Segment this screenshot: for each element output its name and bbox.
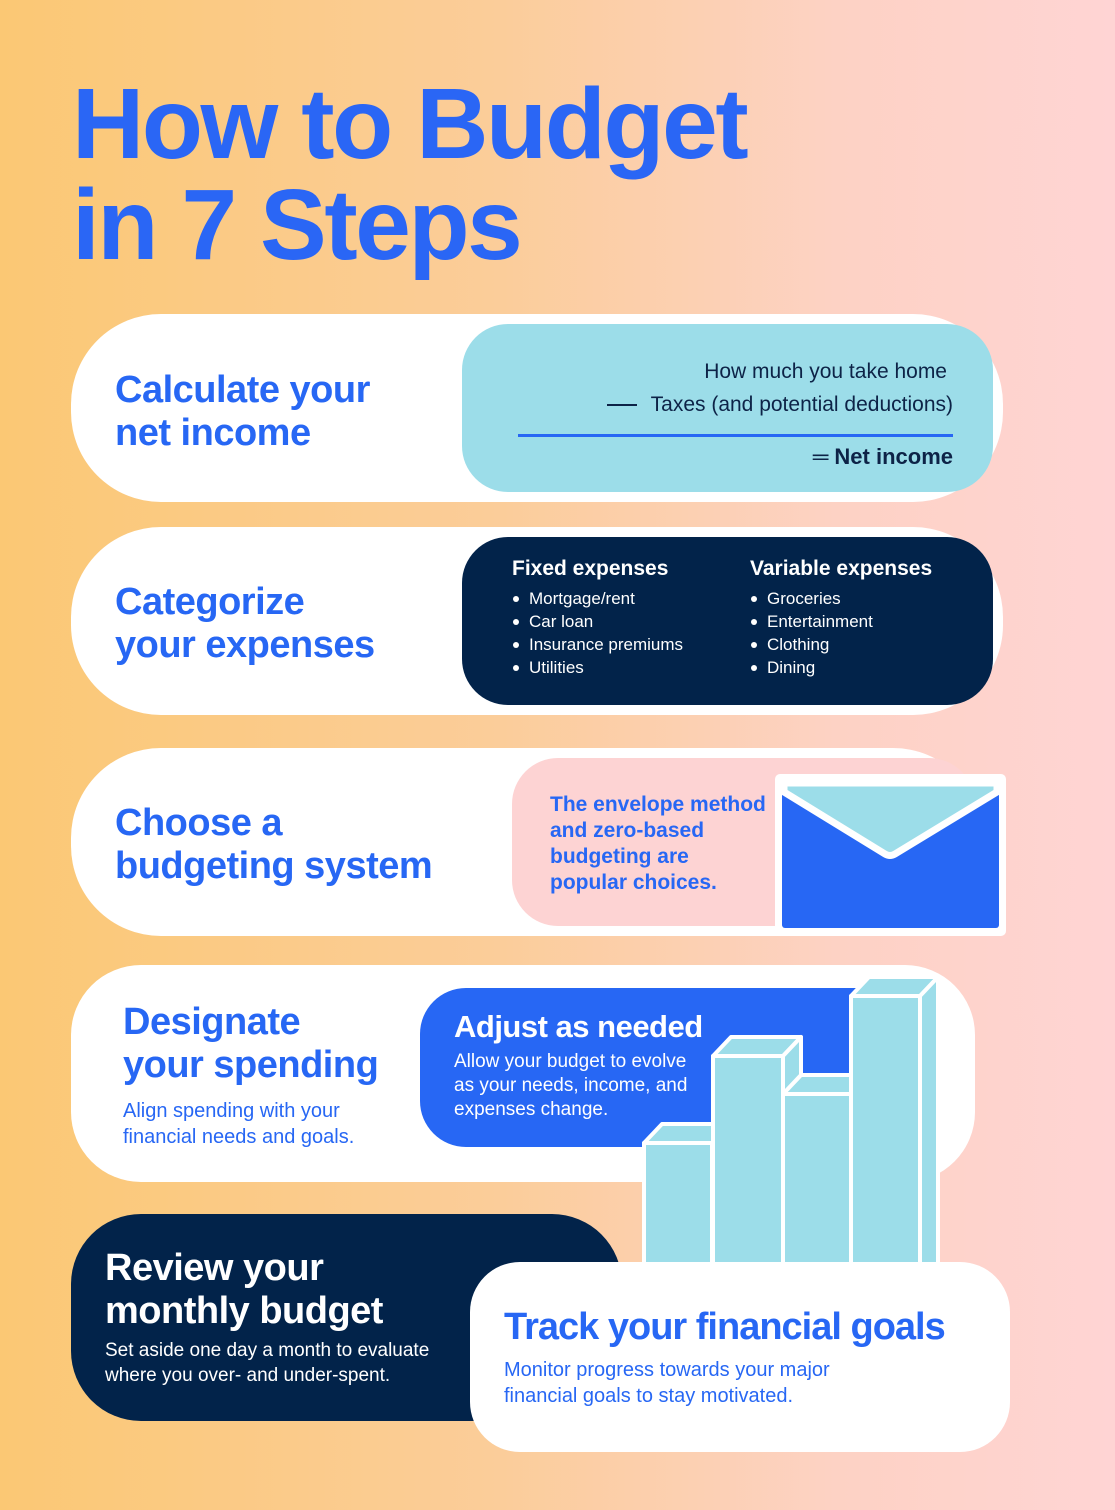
panel: step 2 categorize expenses: [71, 527, 1003, 715]
text: track description: [504, 1359, 830, 1407]
text: track description: Monitor progress towards your major: [504, 1359, 830, 1381]
heading: review your monthly budget: Review your: [105, 1247, 323, 1289]
formula box: ═ Net income: [813, 444, 953, 469]
text: review description: Set aside one day a month to evaluate: [105, 1340, 429, 1361]
icon: envelope: [775, 774, 1006, 936]
text: designate description: financial needs and goals.: [123, 1126, 354, 1148]
expenses box: Fixed expenses: [512, 557, 668, 580]
expenses box: Car loan: [529, 612, 593, 631]
expenses box: Clothing: [767, 635, 829, 654]
title: [72, 68, 748, 281]
expenses box: Groceries: [767, 589, 841, 608]
heading: choose a budgeting system: Choose a: [115, 802, 282, 844]
expenses box: Insurance premiums: [529, 635, 683, 654]
heading: adjust as needed: Adjust as needed: [454, 1009, 703, 1044]
expenses box: Utilities: [529, 658, 584, 677]
formula box: Taxes (and potential deductions): [651, 393, 953, 416]
panel: step 7 track financial goals: [470, 1262, 1010, 1452]
callout: envelope method: budgeting are: [550, 845, 689, 868]
text: review description: where you over- and under-spent.: [105, 1365, 390, 1386]
formula box: How much you take home: [704, 360, 947, 383]
expenses box: Dining: [767, 658, 815, 677]
panel: step 5 adjust as needed: [420, 988, 870, 1147]
text: designate description: [123, 1100, 354, 1148]
heading: choose a budgeting system: [115, 802, 432, 887]
expenses box: [462, 537, 993, 705]
text: designate description: Align spending with your: [123, 1100, 340, 1122]
callout: envelope method: The envelope method: [550, 793, 766, 816]
bar chart icon: [642, 979, 940, 1262]
heading: choose a budgeting system: budgeting system: [115, 845, 432, 887]
text: adjust description: as your needs, income, and: [454, 1075, 687, 1096]
text: adjust description: Allow your budget to evolve: [454, 1051, 686, 1072]
callout: envelope method: [512, 758, 975, 926]
text: adjust description: [454, 1051, 687, 1120]
panel: step 3 choose budgeting system: [71, 748, 983, 936]
formula box: [462, 324, 993, 492]
heading: review your monthly budget: [105, 1247, 383, 1332]
expenses box: Mortgage/rent: [529, 589, 635, 608]
heading: calculate your net income: net income: [115, 412, 311, 454]
heading: review your monthly budget: monthly budget: [105, 1290, 383, 1332]
heading: designate your spending: Designate: [123, 1001, 300, 1043]
heading: designate your spending: [123, 1001, 378, 1086]
expenses box: Variable expenses: [750, 557, 932, 580]
heading: calculate your net income: Calculate your: [115, 369, 370, 411]
title: How to Budget: [72, 68, 746, 180]
heading: designate your spending: your spending: [123, 1044, 378, 1086]
text: review description: [105, 1340, 429, 1386]
callout: envelope method: and zero-based: [550, 819, 704, 842]
heading: categorize your expenses: [115, 581, 375, 666]
heading: categorize your expenses: Categorize: [115, 581, 304, 623]
expenses box: Entertainment: [767, 612, 873, 631]
panel: step 6 review monthly budget: [71, 1214, 622, 1421]
heading: calculate your net income: [115, 369, 370, 454]
heading: categorize your expenses: your expenses: [115, 624, 375, 666]
callout: envelope method: popular choices.: [550, 871, 717, 894]
title: in 7 Steps: [72, 169, 520, 281]
panel: step 4 designate spending: [71, 965, 975, 1182]
text: track description: financial goals to stay motivated.: [504, 1385, 793, 1407]
text: adjust description: expenses change.: [454, 1099, 608, 1120]
panel: step 1 calculate net income: [71, 314, 1003, 502]
heading: track your financial goals: Track your financial goals: [504, 1306, 945, 1348]
